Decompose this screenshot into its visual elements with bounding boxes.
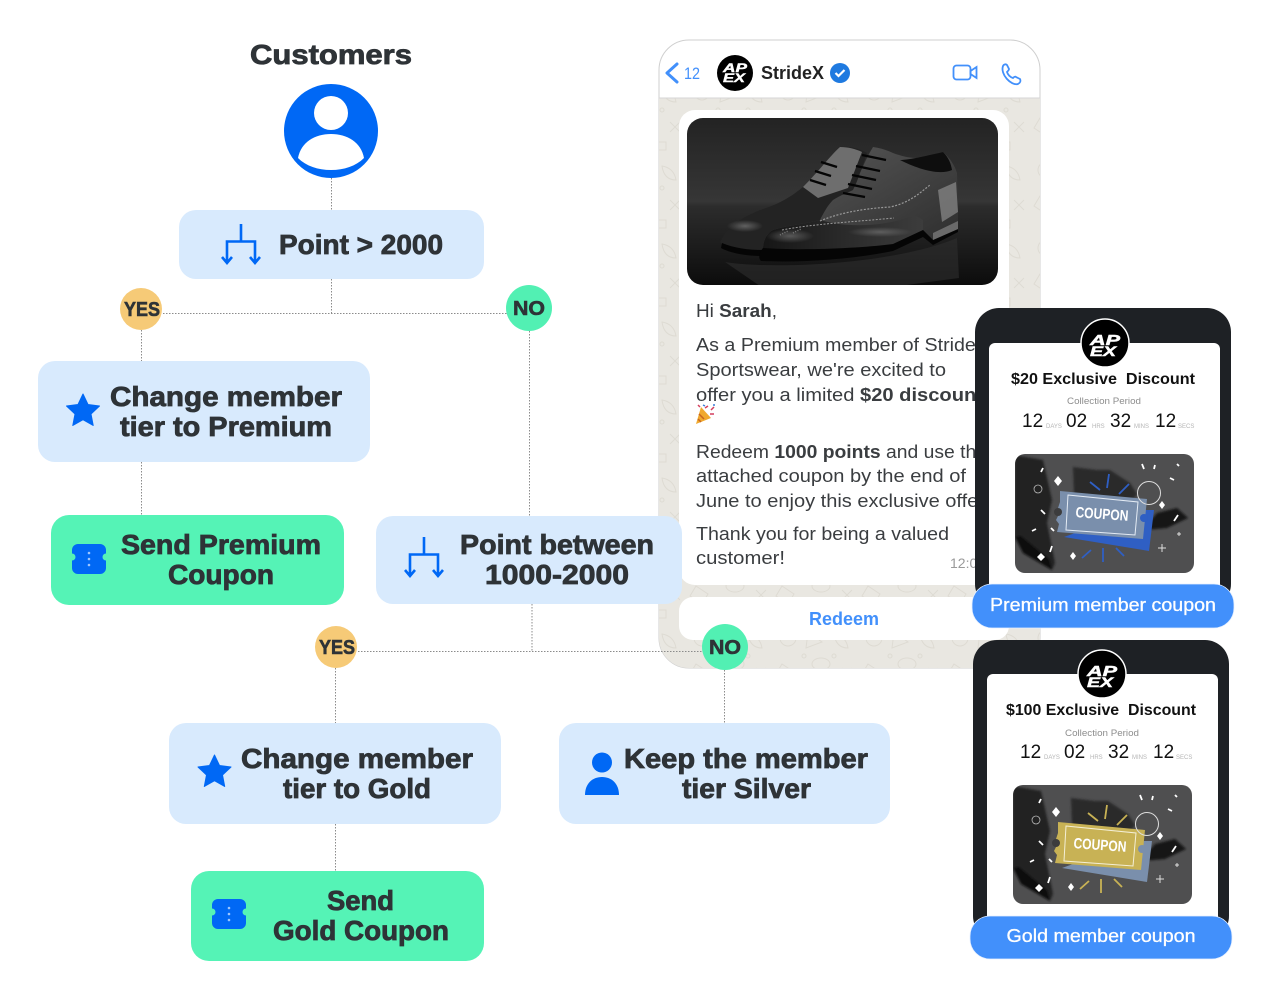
countdown: DAYS (1044, 755, 1060, 761)
product photo: black brogue shoes (687, 118, 998, 286)
message text: Redeem 1000 points and use the (696, 442, 987, 462)
badge: NO (702, 624, 748, 670)
icon: ticket (72, 544, 106, 574)
collection period label: Collection Period (1065, 728, 1139, 739)
coupon title: $100 Exclusive Discount (1006, 702, 1197, 719)
icon: person (585, 752, 619, 795)
icon: brand logo (717, 55, 753, 91)
message text (696, 301, 989, 568)
decision box: Point between 1000-2000: Point between (460, 529, 654, 560)
action box: Change member tier to Premium (38, 361, 370, 462)
icon: back chevron (667, 64, 677, 82)
message text: attached coupon by the end of (696, 466, 967, 486)
icon: party popper (696, 404, 714, 424)
coupon label pill (970, 916, 1232, 959)
heading: Customers: Customers (250, 39, 412, 70)
coupon image: blue ticket with boots: COUPON (1075, 504, 1129, 525)
action box: Change member tier to Gold (169, 723, 501, 824)
coupon label pill: Gold member coupon (1006, 926, 1196, 946)
countdown: 02 (1064, 742, 1085, 763)
icon: brand logo (1081, 319, 1129, 367)
message text: June to enjoy this exclusive offer (696, 491, 985, 511)
message bubble (679, 110, 1009, 585)
decision box: Point > 2000 (179, 210, 484, 279)
countdown: SECS (1176, 755, 1192, 761)
unread count: 12 (684, 64, 700, 83)
connector lines (142, 178, 724, 871)
action box: Keep the member tier Silver: tier Silver (682, 773, 811, 804)
icon: brand logo: EX (1090, 343, 1118, 359)
message text: Sportswear, we're excited to (696, 360, 946, 380)
countdown: HRS (1090, 755, 1103, 761)
icon: star (198, 755, 231, 786)
countdown: MINS (1134, 424, 1149, 430)
badge: NO: NO (709, 637, 741, 659)
countdown: 32 (1110, 411, 1131, 432)
countdown: 12 (1020, 742, 1041, 763)
panel: chat phone mockup (659, 40, 1040, 668)
action box: Send Gold Coupon (191, 871, 484, 961)
badge: YES (120, 288, 162, 330)
countdown: 32 (1108, 742, 1129, 763)
action box: Send Gold Coupon: Gold Coupon (273, 915, 449, 946)
coupon label pill (972, 584, 1234, 628)
badge: YES: YES (124, 299, 160, 321)
decision box: Point > 2000: Point > 2000 (279, 229, 443, 260)
countdown (1022, 411, 1194, 432)
message text: As a Premium member of StrideX (696, 335, 989, 355)
panel: premium coupon card (972, 308, 1234, 628)
icon: split arrows (405, 537, 443, 576)
countdown: DAYS (1046, 424, 1062, 430)
coupon label pill: Premium member coupon (990, 595, 1216, 615)
countdown: HRS (1092, 424, 1105, 430)
action box: Keep the member tier Silver: Keep the member (624, 743, 868, 774)
countdown: 02 (1066, 411, 1087, 432)
action box: Send Gold Coupon: Send (327, 885, 394, 916)
decision box: Point between 1000-2000 (376, 516, 682, 604)
coupon title: $20 Exclusive Discount (1011, 371, 1196, 388)
countdown (1020, 742, 1192, 763)
icon: brand logo (1078, 650, 1126, 698)
icon: brand logo: AP (1086, 663, 1118, 680)
icon: customer avatar (284, 84, 378, 178)
icon: phone call (1002, 64, 1020, 84)
timestamp: 12:00 (950, 555, 985, 571)
action box: Send Premium Coupon: Send Premium (121, 529, 321, 560)
icon: ticket (212, 899, 246, 929)
icon: brand logo: EX (1087, 674, 1115, 690)
coupon image: blue ticket with boots (1015, 454, 1194, 573)
action box: Change member tier to Premium: Change member (110, 381, 342, 412)
panel: gold coupon card (970, 640, 1232, 959)
action box: Change member tier to Gold: tier to Gold (283, 773, 431, 804)
badge: NO (506, 285, 552, 331)
collection period label: Collection Period (1067, 396, 1141, 407)
countdown: 12 (1153, 742, 1174, 763)
action box: Send Premium Coupon: Coupon (168, 559, 274, 590)
redeem button (679, 597, 1009, 640)
icon: brand logo: AP (1089, 332, 1121, 349)
action box: Send Premium Coupon (51, 515, 344, 605)
decision box: Point between 1000-2000: 1000-2000 (485, 559, 629, 590)
message text: offer you a limited $20 discount (696, 385, 983, 405)
countdown: SECS (1178, 424, 1194, 430)
redeem button: Redeem (809, 609, 879, 629)
countdown: 12 (1155, 411, 1176, 432)
message text: Hi Sarah, (696, 301, 777, 321)
icon: star (66, 394, 100, 426)
message text: customer! (696, 548, 785, 568)
icon: brand logo: AP (722, 61, 748, 75)
badge: YES: YES (319, 637, 355, 659)
badge: NO: NO (513, 298, 545, 320)
action box: Change member tier to Gold: Change member (241, 743, 473, 774)
icon: brand logo: EX (723, 71, 746, 85)
countdown: MINS (1132, 755, 1147, 761)
badge: YES (315, 626, 357, 668)
coupon image: gold ticket with boots (1013, 785, 1192, 904)
coupon image: gold ticket with boots: COUPON (1073, 835, 1127, 856)
icon: video call (954, 66, 976, 80)
action box: Keep the member tier Silver (559, 723, 890, 824)
brand name: StrideX (761, 63, 824, 83)
icon: split arrows (222, 224, 260, 263)
message text: Thank you for being a valued (696, 524, 949, 544)
icon: verified badge (830, 63, 850, 83)
countdown: 12 (1022, 411, 1043, 432)
action box: Change member tier to Premium: tier to Premium (120, 411, 332, 442)
